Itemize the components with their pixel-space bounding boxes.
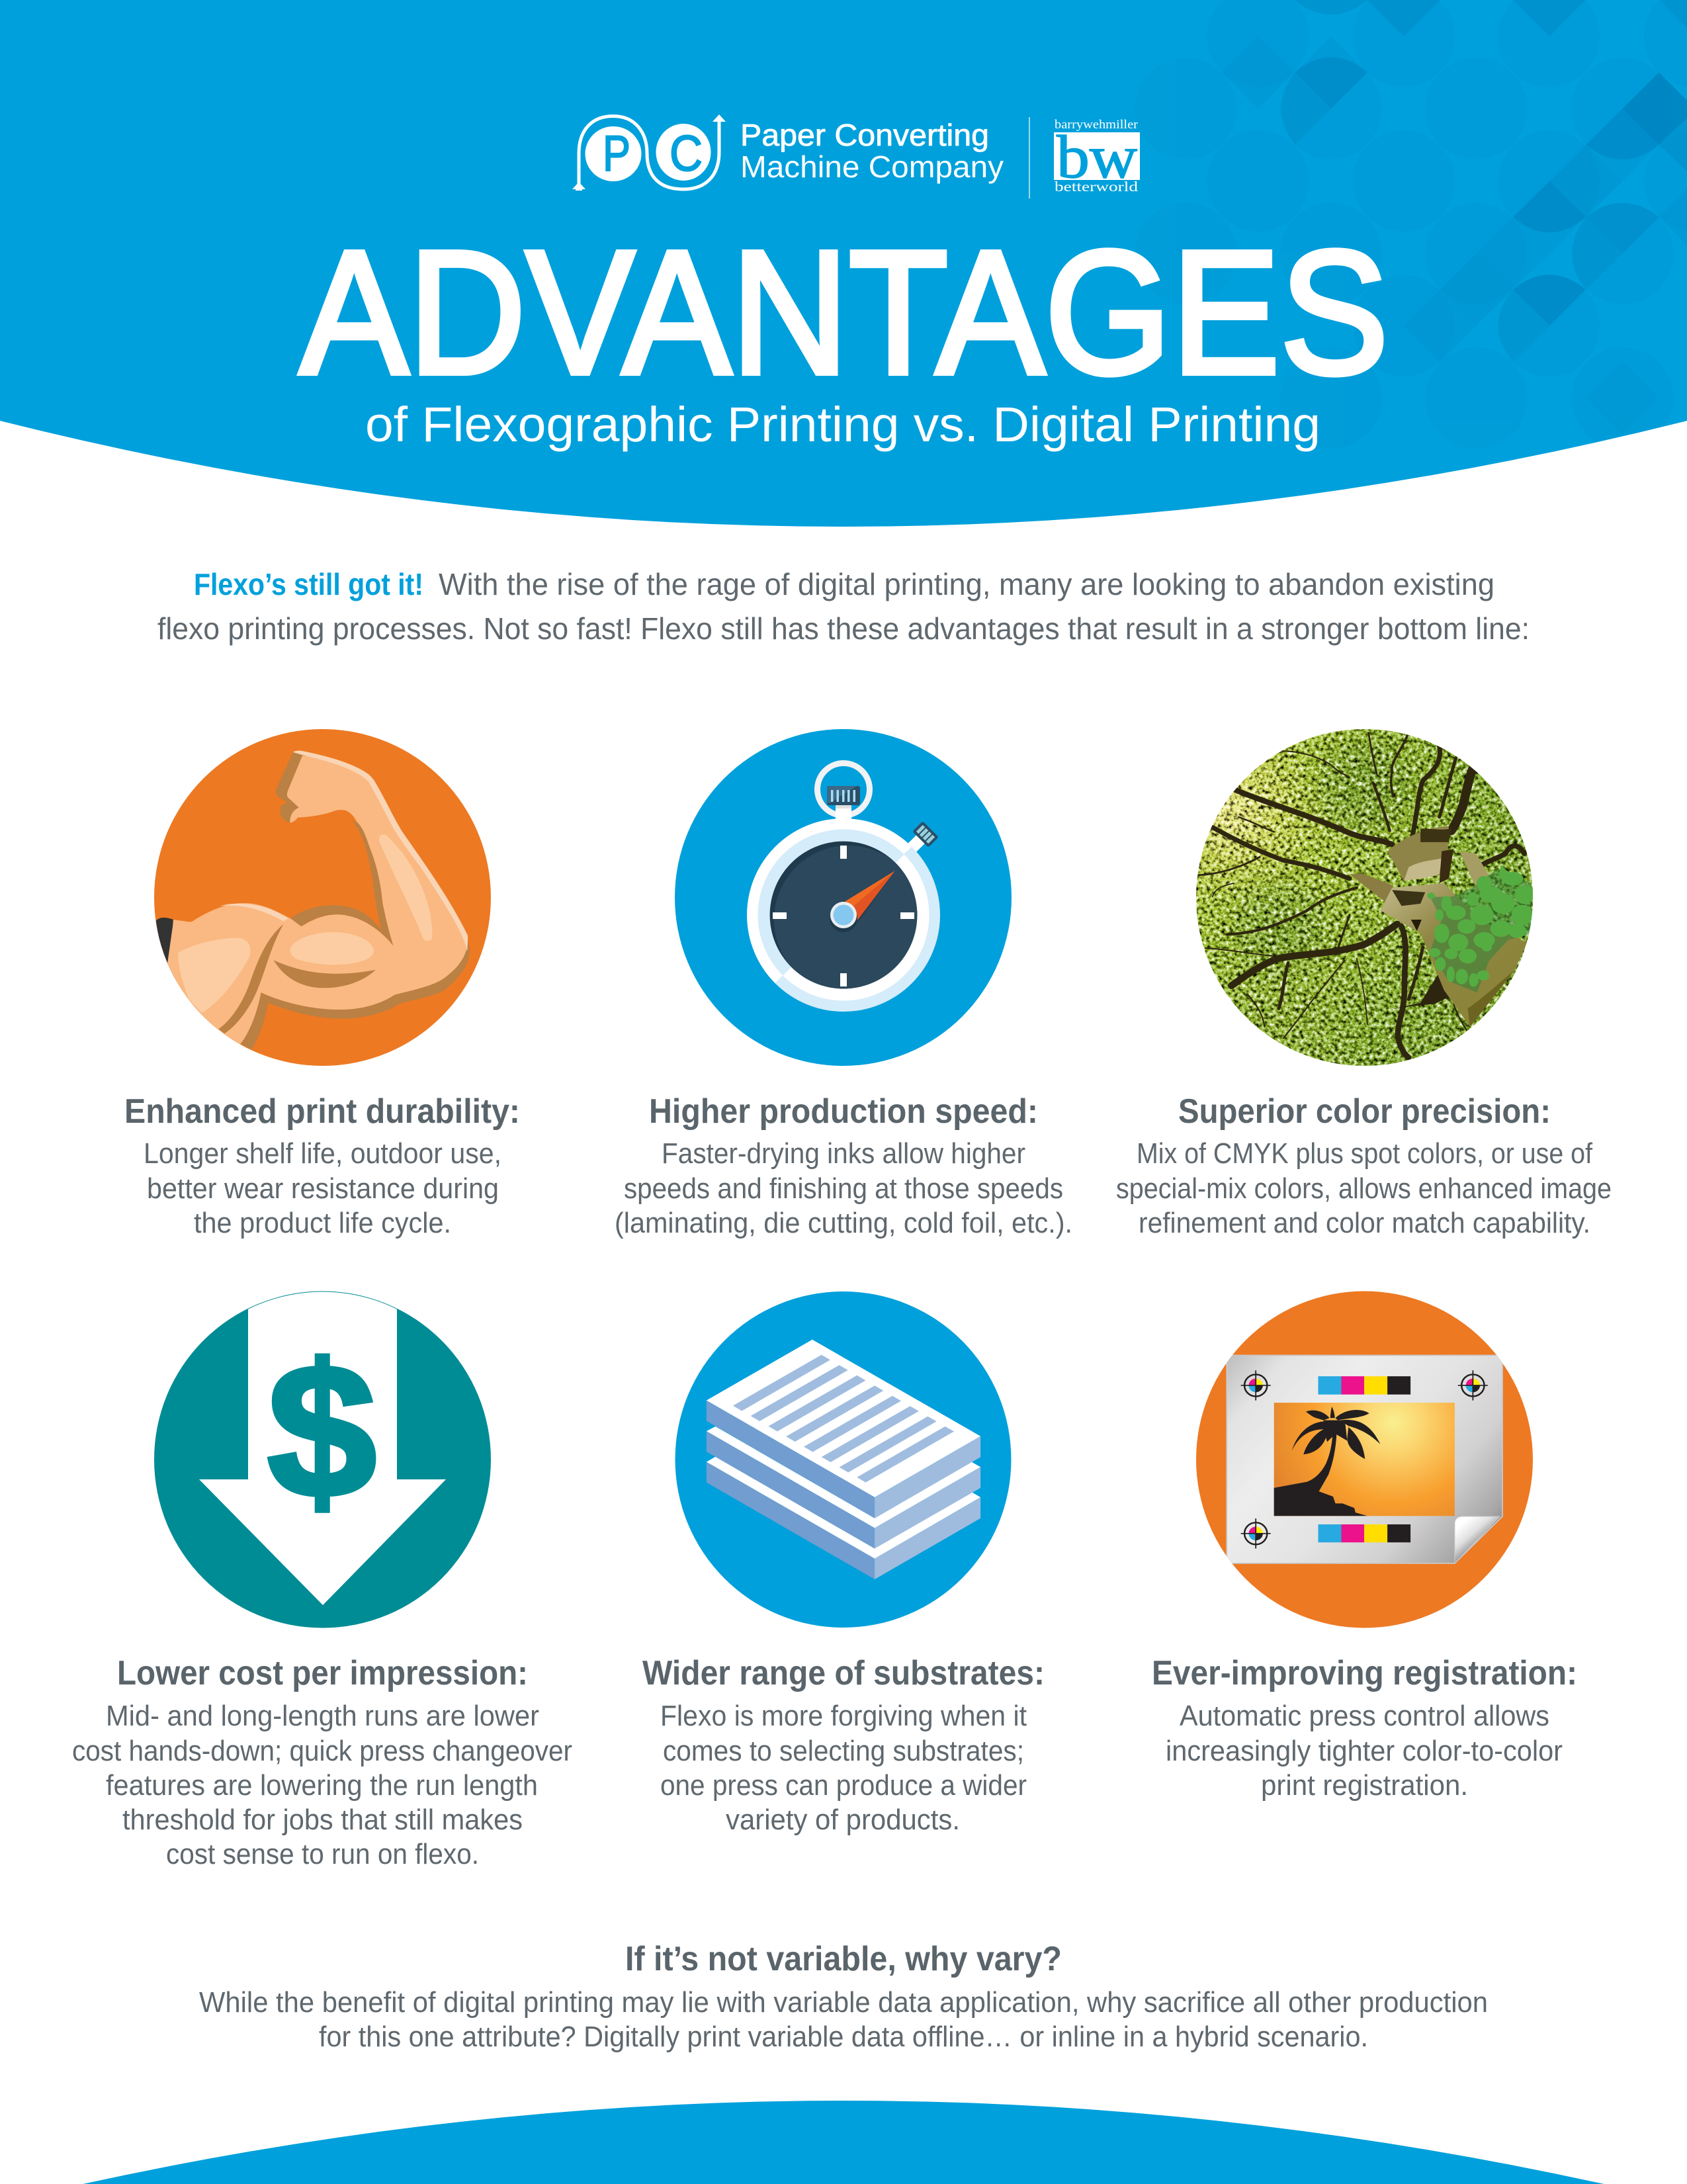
heading block: Higher production speed: (laminating, die cutting, cold foil, etc.). bbox=[615, 1207, 1072, 1239]
heading block: Wider range of substrates: variety of products. bbox=[726, 1804, 960, 1836]
heading block: Wider range of substrates: Flexo is more forgiving when it bbox=[660, 1700, 1027, 1732]
title: ADVANTAGES bbox=[300, 214, 1389, 411]
logo: barrywehmiller bw: bw bbox=[1057, 123, 1138, 191]
icon: print registration sheet bbox=[1196, 1291, 1533, 1628]
icon: dollar down arrow: $ bbox=[267, 1325, 376, 1537]
intro text: With the rise of the rage of digital printing, many are looking to abandon existing bbox=[439, 567, 1494, 601]
icon: dollar down arrow bbox=[154, 1284, 491, 1628]
heading block: Lower cost per impression: threshold for jobs that still makes bbox=[122, 1804, 523, 1836]
heading block: Lower cost per impression: features are lowering the run length bbox=[106, 1769, 538, 1802]
company name: Paper Converting bbox=[740, 118, 989, 152]
intro text: flexo printing processes. Not so fast! Flexo still has these advantages that result in a stronger bottom line: bbox=[157, 611, 1530, 646]
logo: Paper Converting Machine Company bbox=[572, 114, 1140, 198]
heading block: Ever-improving registration bbox=[1152, 1654, 1577, 1802]
icon: PC mark: C bbox=[670, 126, 703, 182]
heading block: Wider range of substrates: comes to selecting substrates; bbox=[663, 1735, 1024, 1767]
icon: PC mark bbox=[572, 114, 726, 191]
heading block: Enhanced print durability bbox=[124, 1092, 520, 1239]
icon: flexing arm bbox=[154, 729, 491, 1066]
intro text bbox=[157, 567, 1530, 646]
closing text block: If it’s not variable, why vary? bbox=[625, 1940, 1062, 1978]
heading block: Enhanced print durability: Enhanced print durability: bbox=[124, 1092, 520, 1131]
closing text block: While the benefit of digital printing may lie with variable data application, why sacrifice all other production bbox=[199, 1986, 1488, 2019]
heading block: Higher production speed bbox=[615, 1092, 1072, 1239]
heading block: Wider range of substrates: Wider range of substrates: bbox=[642, 1654, 1045, 1692]
heading block: Higher production speed: Higher production speed: bbox=[649, 1092, 1038, 1131]
heading block: Lower cost per impression: cost sense to run on flexo. bbox=[166, 1838, 479, 1870]
heading block: Superior color precision: Superior color precision: bbox=[1178, 1092, 1551, 1131]
company name: Machine Company bbox=[740, 150, 1004, 184]
heading block: Superior color precision: Mix of CMYK plus spot colors, or use of bbox=[1137, 1137, 1593, 1170]
heading block: Lower cost per impression: cost hands-down; quick press changeover bbox=[72, 1735, 572, 1767]
heading block: Enhanced print durability: Longer shelf life, outdoor use, bbox=[144, 1137, 501, 1170]
heading block: Lower cost per impression bbox=[72, 1654, 572, 1870]
icon: stopwatch bbox=[675, 729, 1012, 1066]
heading block: Ever-improving registration: print registration. bbox=[1261, 1769, 1468, 1802]
intro text: Flexo’s still got it! bbox=[194, 567, 423, 601]
heading block: Superior color precision: refinement and color match capability. bbox=[1139, 1207, 1590, 1239]
icon: paper stack bbox=[675, 1291, 1011, 1628]
heading block: Lower cost per impression: Mid- and long-length runs are lower bbox=[106, 1700, 539, 1732]
footer arc bbox=[0, 2101, 1687, 2184]
heading block: Wider range of substrates bbox=[642, 1654, 1045, 1836]
heading block: Superior color precision bbox=[1116, 1092, 1612, 1239]
company name bbox=[740, 118, 1004, 184]
closing text block bbox=[199, 1940, 1488, 2053]
heading block: Ever-improving registration: increasingly tighter color-to-color bbox=[1166, 1735, 1563, 1767]
closing text block: for this one attribute? Digitally print variable data offline… or inline in a hybrid scenario. bbox=[319, 2021, 1368, 2053]
icon: tree canopy bbox=[1191, 724, 1541, 1078]
heading block: Higher production speed: Faster-drying inks allow higher bbox=[662, 1137, 1025, 1170]
heading block: Enhanced print durability: better wear resistance during bbox=[147, 1172, 499, 1205]
subtitle: of Flexographic Printing vs. Digital Printing bbox=[365, 397, 1320, 452]
heading block: Lower cost per impression: Lower cost per impression: bbox=[117, 1654, 528, 1692]
heading block: Superior color precision: special-mix colors, allows enhanced image bbox=[1116, 1172, 1612, 1205]
heading block: Higher production speed: speeds and finishing at those speeds bbox=[624, 1172, 1063, 1205]
heading block: Enhanced print durability: the product life cycle. bbox=[194, 1207, 451, 1239]
header banner bbox=[0, 0, 1687, 527]
heading block: Ever-improving registration: Automatic press control allows bbox=[1180, 1700, 1549, 1732]
logo: barrywehmiller bw: barrywehmiller bbox=[1055, 118, 1139, 132]
logo: barrywehmiller bw: betterworld bbox=[1055, 179, 1139, 195]
icon: PC mark: P bbox=[603, 126, 630, 182]
heading block: Wider range of substrates: one press can produce a wider bbox=[660, 1769, 1027, 1802]
heading block: Ever-improving registration: Ever-improving registration: bbox=[1152, 1654, 1577, 1692]
